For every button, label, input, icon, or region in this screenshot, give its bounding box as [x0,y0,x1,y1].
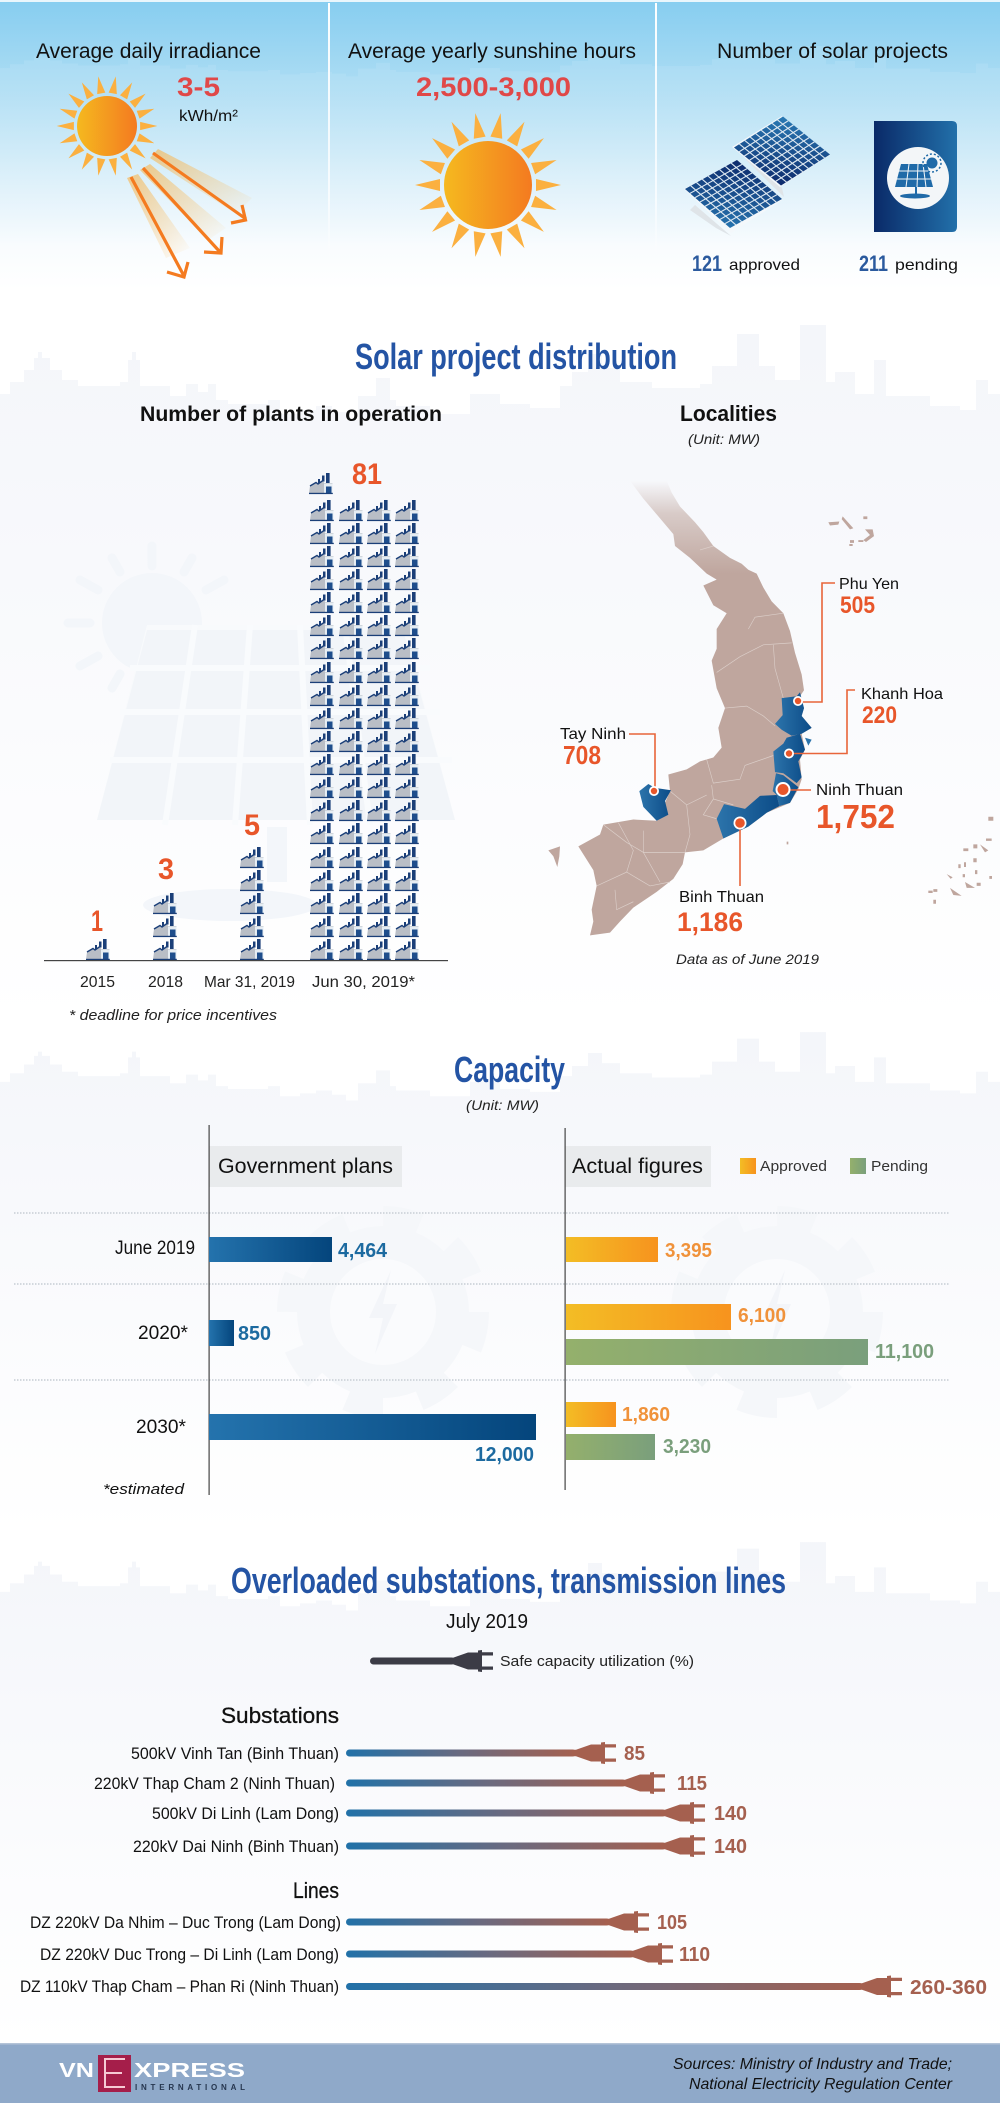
panel: lines [20,1878,987,1999]
row: Duc Trong - Di Linh: DZ 220kV Duc Trong – Di Linh (Lam Dong) [40,1945,339,1964]
legend [740,1158,928,1175]
bars: government plans: 12,000 [475,1444,534,1466]
note: data date: Data as of June 2019 [676,951,819,967]
panel: daily irradiance [36,40,261,277]
background: skyline behind capacity [0,1032,1000,1534]
callout: Binh Thuan [677,816,764,937]
column: Mar 31, 2019: 5 [244,809,260,842]
legend: safe capacity: Safe capacity utilization (%) [500,1653,694,1670]
heading: solar projects: Number of solar projects [717,40,948,63]
row labels: 2020* [138,1323,189,1344]
bars: government plans: 850 [238,1323,271,1345]
heading: lines: Lines [293,1878,339,1903]
header: actual figures [565,1146,711,1187]
bars: pending [566,1339,934,1460]
callout: Ninh Thuan: 1,752 [816,798,895,835]
callout: Phu Yen: 505 [840,592,875,619]
logo: VnExpress International: INTERNATIONAL [135,2083,245,2092]
row: Vinh Tan [131,1742,645,1765]
logo: VnExpress International: XPRESS [134,2060,245,2082]
logo: VnExpress International [59,2055,245,2092]
callout: Binh Thuan: Binh Thuan [679,889,764,906]
column: Mar 31, 2019 [240,809,264,960]
bars: approved: 1,860 [622,1404,670,1426]
heading: overloaded: Overloaded substations, transmission lines [231,1560,786,1601]
row: Thap Cham - Phan Ri: DZ 110kV Thap Cham – Phan Ri (Ninh Thuan) [20,1977,339,1996]
row labels [115,1238,195,1438]
legend: Approved [760,1158,827,1175]
stat: pending: 211 [859,251,888,276]
header: government plans: Government plans [218,1155,393,1178]
heading: number of plants: Number of plants in operation [140,403,442,426]
axis: actual [564,1128,566,1490]
heading: daily irradiance: Average daily irradiance [36,40,261,63]
callout: Khanh Hoa [784,686,943,758]
unit: kWh/m²: kWh/m² [179,108,239,125]
axis labels: Jun 30, 2019* [312,974,415,991]
background: skyline in sky [0,46,1000,269]
background: sky gradient [0,0,1000,290]
region: Ninh Thuan [773,773,798,806]
row: Thap Cham - Phan Ri: 260-360 [910,1977,987,1999]
stat: pending [859,251,958,276]
icon: irradiance arrows [127,149,252,277]
background: skyline behind solar distribution [0,325,1000,1022]
heading: capacity: Capacity [454,1049,565,1090]
row: Dai Ninh: 220kV Dai Ninh (Binh Thuan) [133,1837,339,1856]
column: 2018 [153,853,177,960]
background: skyline behind substations [0,1542,1000,2044]
icon: solar panels [684,116,830,236]
row: Thap Cham 2: 115 [677,1773,707,1795]
legend: safe capacity [370,1650,694,1672]
row: Duc Trong - Di Linh: 110 [679,1944,710,1966]
region: Tay Ninh [639,784,671,821]
panel: solar projects [684,40,958,276]
row: Thap Cham 2: 220kV Thap Cham 2 (Ninh Thuan) [94,1774,335,1793]
column: Jun 30, 2019: 81 [352,458,382,491]
unit: capacity: (Unit: MW) [466,1097,539,1113]
callout: Phu Yen: Phu Yen [839,576,899,593]
callout: Phu Yen [793,576,899,706]
stat: approved: 121 [692,251,722,276]
region: Binh Thuan [717,795,779,839]
axis labels: Mar 31, 2019 [204,974,295,991]
row: Vinh Tan: 500kV Vinh Tan (Binh Thuan) [131,1744,339,1763]
row: Duc Trong - Di Linh [40,1943,710,1966]
bars: approved: 6,100 [738,1305,786,1327]
value: 3-5: 3-5 [177,72,220,102]
panel: sunshine hours [348,40,636,258]
bars: government plans: 4,464 [338,1240,388,1262]
row: Da Nhim - Duc Trong [30,1911,687,1934]
callout: Khanh Hoa: Khanh Hoa [861,686,943,703]
value: 2,500-3,000: 2,500-3,000 [416,72,571,102]
panel: capacity chart [14,1125,950,1498]
icon: sun with rays [57,76,157,176]
legend: Pending [871,1158,928,1175]
row: Di Linh [152,1802,747,1825]
row: Da Nhim - Duc Trong: 105 [657,1912,687,1934]
header: government plans [209,1146,402,1187]
callout: Binh Thuan: 1,186 [677,907,743,937]
column: 2015: 1 [91,905,103,938]
callout: Ninh Thuan: Ninh Thuan [816,782,903,799]
row: Dai Ninh: 140 [714,1836,747,1858]
divider [655,3,657,265]
note: estimated: *estimated [103,1481,185,1498]
stat: approved [692,251,800,276]
row: Di Linh: 500kV Di Linh (Lam Dong) [152,1804,339,1823]
chart: pictogram of plants [44,458,448,991]
sources: National Electricity Regulation Center [689,2076,953,2093]
axis labels: 2018 [148,974,183,991]
row labels: June 2019 [115,1238,195,1259]
panel: substations [94,1703,747,1858]
stat: approved: approved [729,257,800,274]
region: Khanh Hoa [773,734,805,783]
dotted separators [14,1213,950,1380]
bars: approved: 3,395 [665,1240,712,1262]
heading: substations: Substations [221,1703,339,1728]
column: 2015 [86,905,110,960]
axis line [44,960,448,961]
heading: localities: Localities [680,401,777,426]
callout: Tay Ninh: 708 [563,740,601,770]
axis: government [208,1125,210,1495]
bars: approved [566,1237,786,1427]
callout: Tay Ninh: Tay Ninh [560,726,626,743]
row: Dai Ninh [133,1835,747,1858]
callout: Khanh Hoa: 220 [862,702,897,729]
region: Phu Yen [775,692,812,736]
panel: localities [548,401,993,967]
column: 2018: 3 [158,853,174,886]
axis labels: 2015 [80,974,115,991]
panel: plants in operation [44,403,455,1024]
row: Thap Cham 2 [94,1772,707,1795]
callout: Tay Ninh [560,726,659,796]
bars: pending: 3,230 [663,1436,711,1458]
column: Jun 30, 2019 [309,458,419,960]
top edge [0,0,1000,2]
watermark: solar panel [68,546,455,921]
icon: large sun [415,112,561,258]
logo: VnExpress International: VN [59,2060,94,2082]
sources: Sources: Ministry of Industry and Trade; [673,2056,952,2073]
bars: government plans [209,1237,536,1466]
watermark: gears [288,1217,872,1407]
bars: pending: 11,100 [875,1341,934,1363]
stat: pending: pending [895,257,958,274]
map: southern Vietnam [548,481,993,935]
callout: Ninh Thuan [776,782,903,835]
divider [328,3,330,265]
row: Vinh Tan: 85 [624,1743,645,1765]
row: Da Nhim - Duc Trong: DZ 220kV Da Nhim – Duc Trong (Lam Dong) [30,1913,341,1932]
footer [0,2043,1000,2103]
unit: MW: (Unit: MW) [688,431,760,447]
axis labels [80,974,415,991]
row: Di Linh: 140 [714,1803,747,1825]
heading: solar project distribution: Solar project distribution [355,336,677,377]
header: actual figures: Actual figures [572,1155,703,1178]
sources [673,2056,953,2093]
heading: sunshine hours: Average yearly sunshine hours [348,40,636,63]
footnote: price incentives: * deadline for price incentives [69,1007,278,1024]
row: Thap Cham - Phan Ri [20,1976,987,1999]
subheading: July 2019: July 2019 [446,1611,528,1633]
icon: permit document [874,121,957,232]
row labels: 2030* [136,1417,187,1438]
